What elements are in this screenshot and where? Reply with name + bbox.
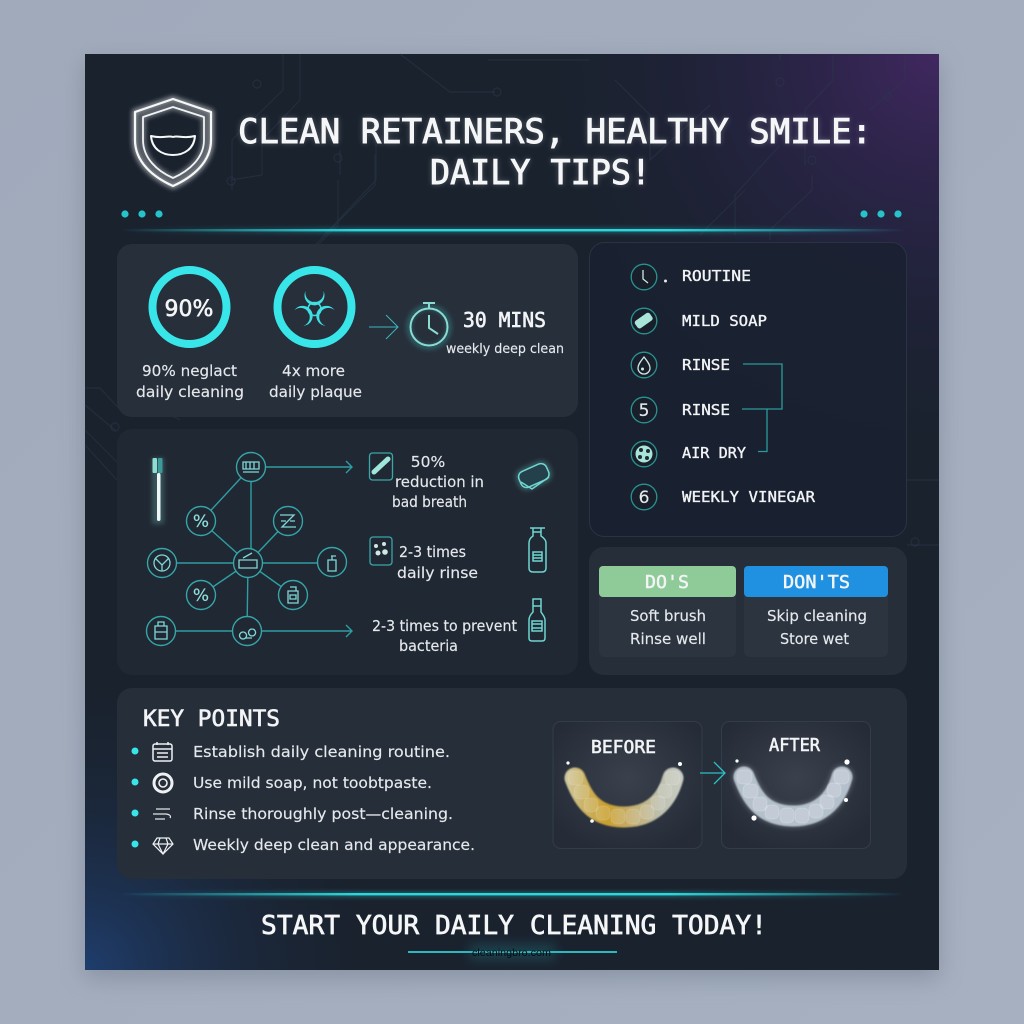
stat ring: biohazard bbox=[278, 270, 352, 344]
step: air dry bbox=[631, 441, 746, 467]
icon: stopwatch bbox=[409, 303, 449, 347]
step: rinse five: 5 bbox=[639, 401, 649, 421]
stat: 30 mins: weekly deep clean bbox=[446, 341, 564, 357]
step: rinse drop: RINSE bbox=[682, 356, 730, 374]
step: weekly vinegar: WEEKLY VINEGAR bbox=[682, 488, 816, 506]
step: mild soap: MILD SOAP bbox=[682, 312, 767, 330]
text: prevent bacteria: 2-3 times to prevent bbox=[372, 617, 517, 635]
network nodes: % bbox=[193, 512, 209, 532]
column: don'ts: DON'TS bbox=[783, 572, 850, 593]
panel: cleaning network bbox=[117, 429, 578, 675]
step: weekly vinegar bbox=[631, 484, 816, 510]
network nodes bbox=[146, 452, 346, 646]
column: do's bbox=[599, 566, 736, 657]
text: bad breath reduction bbox=[392, 453, 484, 511]
network connector lines bbox=[161, 461, 352, 637]
text: daily rinse: daily rinse bbox=[397, 564, 478, 582]
stat ring: 90% bbox=[152, 270, 226, 344]
step: rinse five bbox=[631, 397, 730, 423]
before card: BEFORE bbox=[591, 737, 656, 758]
step: mild soap bbox=[631, 308, 767, 334]
bullet: appearance: Weekly deep clean and appearance. bbox=[193, 836, 475, 854]
stat label: plaque: daily plaque bbox=[269, 383, 362, 401]
text: bad breath reduction: reduction in bbox=[395, 473, 484, 491]
panel: routine steps bbox=[590, 242, 906, 536]
panel: key points and before/after bbox=[117, 688, 907, 879]
decorative dots left bbox=[121, 210, 163, 218]
stat label: plaque: 4x more bbox=[282, 362, 345, 380]
after card bbox=[722, 722, 870, 848]
panel: statistics bbox=[117, 244, 578, 417]
call to action: START YOUR DAILY CLEANING TODAY! bbox=[261, 911, 767, 941]
image: clean retainer bbox=[735, 759, 850, 823]
icon: toothbrush bbox=[152, 458, 164, 524]
arrow: before to after bbox=[700, 762, 725, 784]
column: do's: Soft brush bbox=[630, 607, 706, 625]
icon: bottle two bbox=[529, 599, 545, 641]
step: weekly vinegar: 6 bbox=[639, 488, 649, 508]
icon: glowing shield with smile bbox=[135, 99, 211, 186]
decorative dots right bbox=[860, 210, 902, 218]
column: don'ts: Store wet bbox=[780, 630, 849, 648]
icon: brush tile bbox=[370, 453, 392, 480]
website credit: cleaningbro.com bbox=[472, 947, 551, 959]
stat ring: 90%: 90% bbox=[165, 297, 213, 322]
bracket connector bbox=[742, 364, 782, 452]
bullet: rinse: Rinse thoroughly post—cleaning. bbox=[193, 805, 453, 823]
arrow bbox=[369, 315, 398, 339]
text: bad breath reduction: bad breath bbox=[392, 493, 467, 511]
step: routine bbox=[631, 264, 751, 290]
stat: 30 mins: 30 MINS bbox=[463, 308, 546, 332]
footer accent line bbox=[408, 945, 617, 959]
title bbox=[238, 112, 872, 193]
stat label: neglect: daily cleaning bbox=[136, 383, 244, 401]
text: daily rinse bbox=[397, 543, 478, 582]
step: air dry: AIR DRY bbox=[682, 444, 746, 462]
icon: bottle one bbox=[529, 528, 546, 572]
column: do's: Rinse well bbox=[630, 630, 706, 648]
text: daily rinse: 2-3 times bbox=[399, 543, 466, 561]
step: routine: ROUTINE bbox=[682, 267, 751, 285]
column: don'ts bbox=[744, 566, 888, 657]
network nodes: % bbox=[193, 586, 209, 606]
stat: 30 mins bbox=[446, 308, 564, 357]
step: rinse five: RINSE bbox=[682, 401, 730, 419]
heading: key points: KEY POINTS bbox=[143, 707, 280, 732]
header divider bbox=[120, 228, 905, 233]
bullet: soap: Use mild soap, not toobtpaste. bbox=[193, 774, 432, 792]
footer divider bbox=[120, 892, 905, 897]
title: CLEAN RETAINERS, HEALTHY SMILE: bbox=[238, 112, 872, 152]
column: do's: DO'S bbox=[645, 572, 689, 593]
before card bbox=[553, 722, 702, 848]
stat label: neglect: 90% neglact bbox=[142, 362, 237, 380]
text: prevent bacteria: bacteria bbox=[399, 637, 458, 655]
column: don'ts: Skip cleaning bbox=[767, 607, 867, 625]
panel: do's and don'ts bbox=[589, 547, 907, 675]
text: bad breath reduction: 50% bbox=[411, 453, 445, 471]
stat label: plaque bbox=[269, 362, 362, 401]
image: yellowed retainer bbox=[566, 761, 682, 824]
icon: soap bar bbox=[517, 462, 551, 489]
step: rinse drop bbox=[631, 352, 730, 378]
stat label: neglect bbox=[136, 362, 244, 401]
main card bbox=[85, 54, 939, 970]
bullet: routine: Establish daily cleaning routine. bbox=[193, 743, 450, 761]
after card: AFTER bbox=[769, 735, 820, 756]
text: prevent bacteria bbox=[372, 617, 517, 655]
icon: bacteria tile bbox=[370, 537, 392, 565]
title: DAILY TIPS! bbox=[430, 153, 651, 193]
